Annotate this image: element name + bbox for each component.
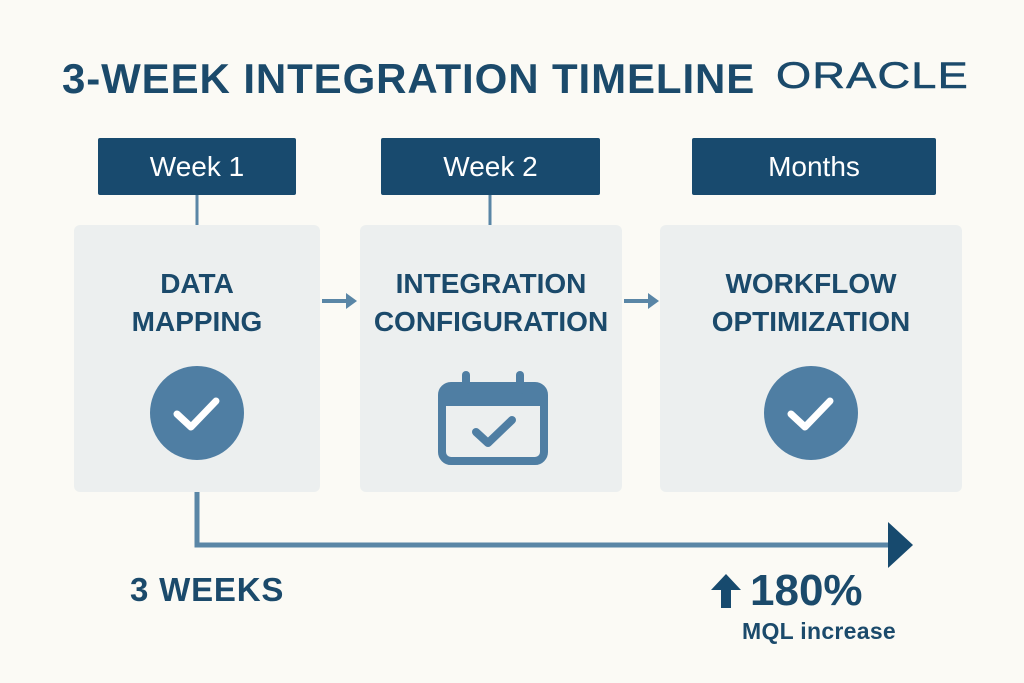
months label: Months [768, 150, 860, 182]
week 1 label [98, 138, 296, 195]
arrow: panel 1 to 2 [322, 293, 357, 309]
panel: data mapping: DATA [160, 268, 234, 299]
panel: workflow optimization: WORKFLOW [725, 268, 897, 299]
panel: integration configuration: INTEGRATION [396, 268, 586, 299]
icon: check circle [764, 366, 858, 460]
stat: 180% [711, 566, 896, 644]
panel: data mapping [74, 225, 320, 492]
panel: integration configuration [360, 225, 622, 492]
stat: 180%: 180% [750, 566, 863, 615]
panel: workflow optimization: OPTIMIZATION [712, 306, 910, 337]
week 2 label [381, 138, 600, 195]
week 1 label: Week 1 [150, 150, 244, 182]
duration label: 3 WEEKS [130, 571, 284, 608]
icon: calendar [438, 371, 548, 465]
stat: 180%: MQL increase [742, 618, 896, 644]
logo: oracle: ORACLE [776, 55, 969, 96]
timeline arrow [194, 492, 913, 568]
months label [692, 138, 936, 195]
panel: workflow optimization [660, 225, 962, 492]
panel: integration configuration: CONFIGURATION [374, 306, 608, 337]
week 2 label: Week 2 [443, 150, 538, 182]
arrow: panel 2 to 3 [624, 293, 659, 309]
title: 3-WEEK INTEGRATION TIMELINE [62, 55, 755, 102]
icon: check circle [150, 366, 244, 460]
icon: up arrow [711, 574, 741, 608]
panel: data mapping: MAPPING [132, 306, 262, 337]
